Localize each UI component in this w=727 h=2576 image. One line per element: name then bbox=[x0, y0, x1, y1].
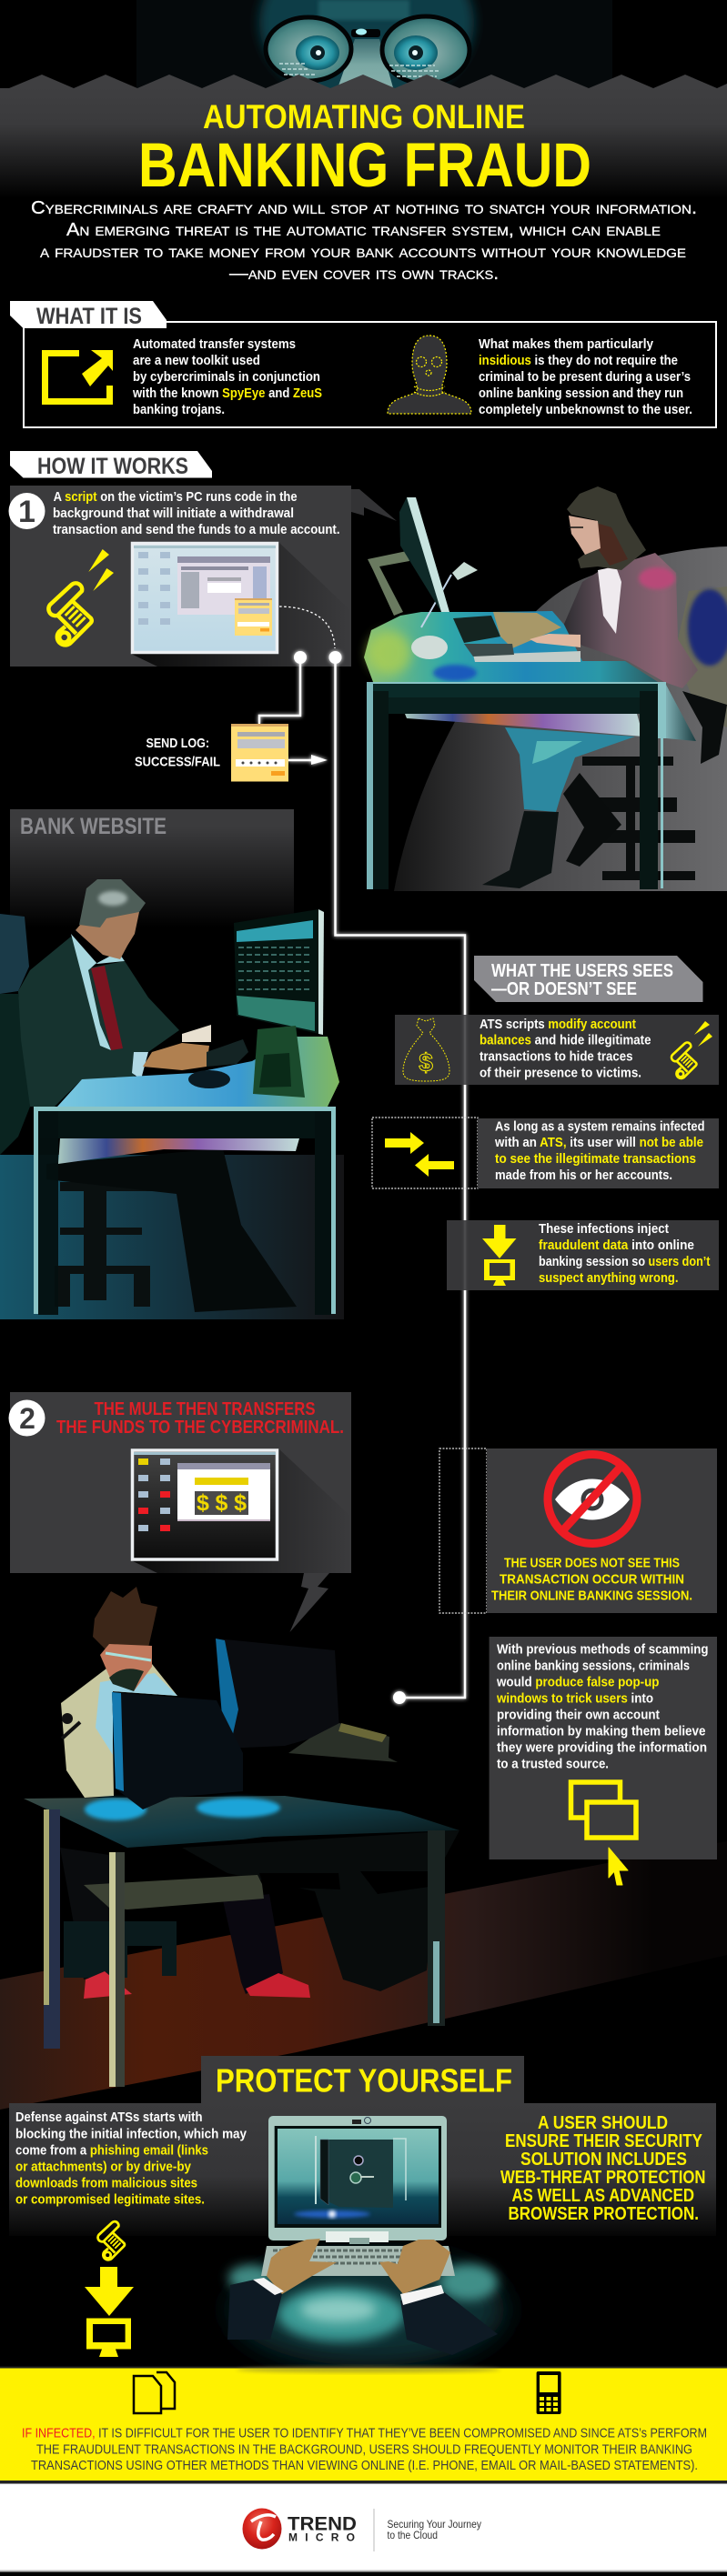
text: what makes them insidious: insidious is they do not require the bbox=[479, 353, 678, 368]
text: modify: of their presence to victims. bbox=[480, 1066, 641, 1080]
text: previous methods: online banking sessions, criminals bbox=[497, 1659, 690, 1673]
panel: step 2 bbox=[9, 1392, 351, 1632]
intro text: An emerging threat is the automatic transfer system, which can enable bbox=[66, 220, 661, 240]
text: what makes them insidious: online banking session and they run bbox=[479, 386, 683, 401]
intro text: —and even cover its own tracks. bbox=[229, 264, 499, 284]
heading tab: what it is bbox=[10, 301, 167, 329]
text: does not see: THE USER DOES NOT SEE THIS bbox=[504, 1555, 680, 1571]
header illustration: eyes behind glasses bbox=[136, 0, 612, 105]
text: previous methods bbox=[496, 1642, 708, 1771]
text: a user should ensure bbox=[500, 2112, 706, 2224]
panel: user does not see bbox=[439, 1448, 717, 1613]
connector: dotted curve bbox=[279, 606, 335, 648]
send log label: SUCCESS/FAIL bbox=[135, 755, 220, 769]
text: modify bbox=[480, 1017, 651, 1080]
chair bbox=[678, 586, 727, 727]
text: does not see bbox=[491, 1555, 692, 1604]
number badge 2: 2 bbox=[19, 1402, 35, 1435]
desk frame bbox=[367, 682, 666, 691]
icon: export arrow bbox=[42, 350, 113, 405]
icon: script scroll bbox=[671, 1021, 712, 1078]
text: fraudulent data: banking session so users don’t bbox=[539, 1254, 710, 1269]
connector: main flow line bbox=[329, 651, 465, 1704]
icon: script scroll with bolts bbox=[48, 549, 114, 645]
text: previous methods: windows to trick users into bbox=[496, 1691, 653, 1706]
icon: swap arrows bbox=[385, 1132, 454, 1177]
monitor bbox=[399, 497, 449, 612]
text: defense against ATSs: or compromised legitimate sites. bbox=[15, 2191, 205, 2208]
icon: cursor bbox=[609, 1848, 628, 1885]
connector: line to send log bbox=[259, 651, 307, 724]
text: defense against ATSs: downloads from malicious sites bbox=[15, 2175, 197, 2191]
safe bbox=[320, 2140, 393, 2208]
text: defense against ATSs: Defense against ATSs starts with bbox=[15, 2110, 202, 2125]
desk frame bbox=[34, 1107, 336, 1111]
table legs bbox=[44, 1809, 60, 2049]
text: what makes them insidious: What makes them particularly bbox=[479, 336, 654, 352]
lamp bbox=[452, 562, 478, 580]
title bbox=[138, 98, 591, 200]
number badge 2 bbox=[9, 1400, 45, 1437]
stool bbox=[55, 1182, 157, 1307]
small monitor bbox=[253, 1026, 305, 1098]
icon: money bag: $ bbox=[419, 1048, 433, 1077]
heading tab: what the users sees bbox=[474, 956, 702, 1002]
step 2 heading: THE FUNDS TO THE CYBERCRIMINAL. bbox=[56, 1417, 344, 1438]
title: AUTOMATING ONLINE bbox=[203, 98, 525, 135]
send log label bbox=[135, 736, 220, 769]
text: a user should ensure: A USER SHOULD bbox=[538, 2112, 668, 2133]
text: fraudulent data: These infections inject bbox=[539, 1221, 669, 1237]
icon: masked criminal bbox=[388, 336, 471, 414]
heading tab: what the users sees: WHAT THE USERS SEES bbox=[491, 960, 673, 981]
panel: step 1 bbox=[9, 486, 397, 667]
desk surface bbox=[364, 611, 658, 682]
keyboard and hands bbox=[453, 616, 500, 643]
illustration: victim woman at desk bbox=[364, 486, 727, 891]
panel: false pop-ups bbox=[490, 1637, 717, 1859]
red shoes bbox=[246, 1973, 310, 1998]
trousers bbox=[46, 1148, 297, 1312]
face bbox=[100, 1644, 152, 1691]
laptop base bbox=[261, 2246, 455, 2276]
hair bbox=[567, 486, 646, 570]
text: defense against ATSs: come from a phishing email (links bbox=[15, 2142, 208, 2159]
back monitor bbox=[216, 1639, 339, 1749]
intro text bbox=[31, 198, 697, 284]
text: does not see: THEIR ONLINE BANKING SESSION. bbox=[491, 1588, 692, 1604]
step 2 heading: THE MULE THEN TRANSFERS bbox=[95, 1398, 315, 1419]
speech tail bbox=[351, 489, 397, 521]
heading: protect yourself bbox=[201, 2056, 524, 2104]
monitor bbox=[234, 909, 324, 1035]
icon: crossed eye bbox=[548, 1455, 637, 1544]
text: not able: to see the illegitimate transactions bbox=[495, 1151, 696, 1167]
panel: protect yourself background bbox=[9, 2103, 716, 2236]
stool bbox=[64, 1921, 177, 1978]
desktop window with money bbox=[133, 1450, 277, 1559]
drawer bbox=[84, 1875, 264, 1909]
tabletop bbox=[24, 1796, 459, 1848]
text: fraudulent data: suspect anything wrong. bbox=[539, 1270, 679, 1286]
tagline bbox=[388, 2518, 481, 2541]
step 1 text: background that will initiate a withdrawal bbox=[53, 506, 294, 521]
keyboard dome bbox=[288, 1723, 398, 1762]
text: defense against ATSs: or attachments) or by drive-by bbox=[15, 2159, 192, 2175]
panel: if infected bbox=[0, 2366, 727, 2484]
text: does not see: TRANSACTION OCCUR WITHIN bbox=[500, 1571, 684, 1588]
illustration: mule at desk bbox=[24, 1587, 459, 2087]
step 1 text bbox=[53, 489, 340, 537]
text: modify: transactions to hide traces bbox=[480, 1049, 633, 1064]
suit bbox=[18, 937, 179, 1107]
desk surface bbox=[57, 1037, 339, 1107]
sleeves bbox=[227, 2280, 282, 2340]
cuffs bbox=[253, 2278, 284, 2295]
laptop lid bbox=[268, 2116, 447, 2240]
text: modify: balances and hide illegitimate bbox=[480, 1033, 651, 1047]
log panel bbox=[231, 724, 288, 782]
tagline: Securing Your Journey bbox=[388, 2518, 481, 2531]
panel: bank website heading block bbox=[10, 809, 294, 927]
long shadow bbox=[131, 542, 351, 667]
text: what makes them insidious: criminal to be present during a user’s bbox=[479, 369, 691, 385]
icon: money bag bbox=[403, 1018, 449, 1081]
panel: what it is bbox=[10, 301, 716, 427]
text: a user should ensure: SOLUTION INCLUDES bbox=[520, 2149, 687, 2170]
logo: trend micro bbox=[242, 2508, 357, 2550]
jacket bbox=[561, 553, 698, 688]
text: previous methods: would produce false pop-up bbox=[496, 1675, 659, 1689]
trousers bbox=[505, 727, 635, 812]
illustration: laptop and hands bbox=[227, 2116, 505, 2366]
step 1 text: transaction and send the funds to a mule account. bbox=[53, 522, 340, 537]
header band with zig-zag edge bbox=[0, 75, 727, 198]
text: previous methods: they were providing the information bbox=[497, 1740, 707, 1755]
shirt bbox=[61, 1664, 177, 1798]
text: fraudulent data: fraudulent data into online bbox=[539, 1238, 694, 1253]
text: automated transfer systems: Automated transfer systems bbox=[133, 336, 296, 352]
hands bbox=[267, 2239, 337, 2294]
illustration: floor bbox=[0, 1841, 727, 2110]
intro text: a fraudster to take money from your bank accounts without your knowledge bbox=[40, 242, 686, 262]
text: not able: with an ATS, its user will not be able bbox=[494, 1135, 703, 1150]
desktop window with money: $$$ bbox=[197, 1490, 247, 1516]
text: if infected bbox=[22, 2426, 707, 2473]
title: BANKING FRAUD bbox=[138, 130, 591, 200]
text: what makes them insidious bbox=[479, 336, 692, 417]
front monitor bbox=[112, 1692, 243, 1809]
heading: protect yourself: PROTECT YOURSELF bbox=[216, 2062, 512, 2099]
footer bbox=[0, 2484, 727, 2571]
intro text: Cybercriminals are crafty and will stop at nothing to snatch your information. bbox=[31, 198, 697, 218]
hair bbox=[93, 1587, 157, 1650]
panel: bank website heading block: BANK WEBSITE bbox=[20, 814, 167, 839]
number badge 1 bbox=[9, 493, 45, 529]
text: previous methods: information by making them believe bbox=[497, 1724, 706, 1739]
text: what makes them insidious: completely unbeknownst to the user. bbox=[479, 402, 692, 417]
logo: trend micro: TREND bbox=[288, 2513, 357, 2535]
number badge 1: 1 bbox=[18, 495, 35, 529]
keyboard and mouse bbox=[207, 1039, 248, 1067]
send log label: SEND LOG: bbox=[146, 736, 209, 751]
text: automated transfer systems bbox=[132, 336, 322, 417]
panel: fraudulent data bbox=[447, 1220, 719, 1290]
head bbox=[76, 912, 139, 959]
icon: infection flow bbox=[85, 2221, 134, 2357]
face bbox=[569, 516, 601, 555]
text: modify: ATS scripts modify account bbox=[480, 1017, 636, 1032]
text: previous methods: providing their own account bbox=[497, 1708, 660, 1722]
tagline: to the Cloud bbox=[388, 2529, 438, 2541]
icon: pop-up windows bbox=[571, 1782, 636, 1838]
panel: not able to see bbox=[372, 1118, 719, 1188]
text: defense against ATSs bbox=[15, 2110, 247, 2208]
hands bbox=[143, 1043, 209, 1070]
logo: trend micro: MICRO bbox=[288, 2531, 355, 2544]
monitor arm bbox=[368, 551, 409, 616]
text: automated transfer systems: by cybercriminals in conjunction bbox=[133, 369, 320, 385]
text: not able: made from his or her accounts. bbox=[495, 1168, 672, 1183]
desktop window bbox=[133, 544, 277, 653]
text: not able bbox=[494, 1118, 704, 1183]
back leg bbox=[563, 773, 621, 867]
icon: arrow into monitor bbox=[482, 1225, 517, 1286]
panel: modify balances bbox=[395, 1015, 719, 1085]
heading tab: what it is: WHAT IT IS bbox=[36, 304, 142, 329]
speech tail bbox=[289, 1573, 329, 1632]
text: automated transfer systems: are a new toolkit used bbox=[133, 353, 260, 368]
icon: documents bbox=[134, 2372, 175, 2413]
text: defense against ATSs: blocking the initial infection, which may bbox=[15, 2126, 247, 2142]
person legs bbox=[60, 1848, 109, 1980]
illustration: bank man at desk bbox=[0, 879, 344, 1319]
text: automated transfer systems: with the known SpyEye and ZeuS bbox=[132, 386, 322, 401]
text: previous methods: to a trusted source. bbox=[497, 1757, 609, 1771]
heading tab: how it works: HOW IT WORKS bbox=[37, 454, 188, 479]
text: fraudulent data bbox=[539, 1221, 710, 1286]
heading tab: what the users sees: —OR DOESN’T SEE bbox=[491, 978, 637, 999]
step 1 text: A script on the victim’s PC runs code in the bbox=[54, 489, 298, 505]
icon: phone bbox=[537, 2371, 561, 2414]
text: automated transfer systems: banking trojans. bbox=[133, 402, 225, 417]
arrow: log to line bbox=[288, 755, 328, 765]
boot bbox=[482, 811, 559, 888]
step 2 heading bbox=[56, 1398, 344, 1438]
